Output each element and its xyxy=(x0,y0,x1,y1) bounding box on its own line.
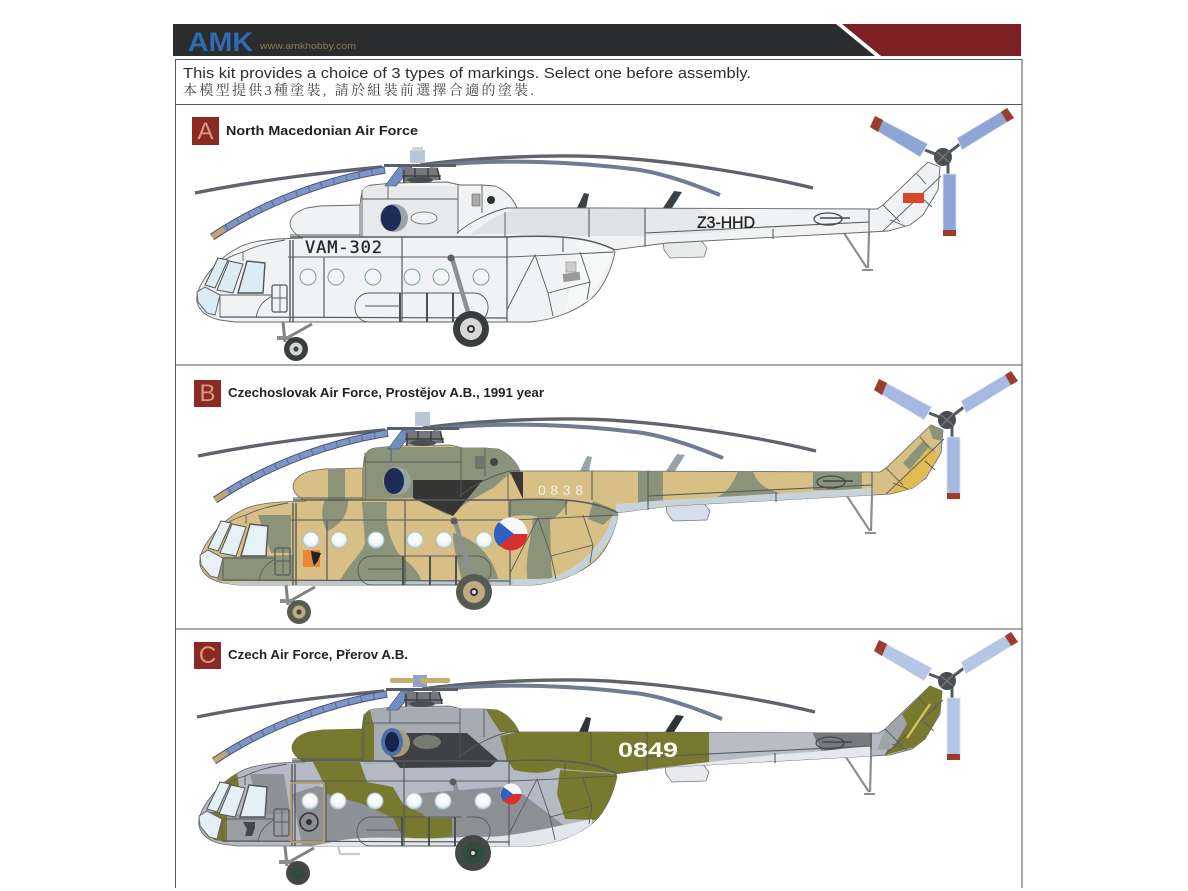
tail rotor A xyxy=(870,108,1014,236)
fuselage C xyxy=(199,686,942,846)
panel B heading: Czechoslovak Air Force, Prostějov A.B., 1991 year xyxy=(228,385,544,400)
windows B xyxy=(303,532,492,548)
engine intake B xyxy=(383,467,411,495)
red corner of header xyxy=(842,24,1021,56)
white slash in header xyxy=(836,24,881,56)
frame lines xyxy=(175,59,1022,888)
registration VAM-302: VAM-302 xyxy=(305,238,382,258)
camouflage B xyxy=(203,425,945,587)
roundel B xyxy=(494,518,528,550)
shading A xyxy=(362,186,730,312)
crest B xyxy=(303,550,321,567)
fuselage B xyxy=(200,425,943,585)
main rotor A xyxy=(195,147,813,237)
windows C xyxy=(302,793,491,809)
helicopter A: North Macedonian Air Force xyxy=(195,108,1014,361)
panel C heading: Czech Air Force, Přerov A.B. xyxy=(228,647,408,662)
helicopter C: Czech Air Force xyxy=(197,632,1018,885)
lion emblem C xyxy=(243,822,255,836)
fin lettering C xyxy=(907,704,930,738)
panel A heading: North Macedonian Air Force xyxy=(226,123,418,138)
insignia C xyxy=(300,813,318,831)
helicopter B: Czechoslovak Air Force xyxy=(198,371,1018,624)
panel B heading badge: B xyxy=(199,380,216,407)
panel B heading badge xyxy=(194,380,221,407)
fin flag xyxy=(903,193,924,203)
main rotor C xyxy=(197,675,815,761)
serial 0849: 0849 xyxy=(618,739,678,762)
panel C heading badge xyxy=(194,642,221,669)
fuselage A xyxy=(197,162,940,322)
header bar xyxy=(173,24,1021,57)
panel A heading badge: A xyxy=(197,118,214,145)
tail rotor C xyxy=(874,632,1018,760)
website url: www.amkhobby.com xyxy=(259,41,356,52)
intro text chinese: 本模型提供3種塗裝, 請於組裝前選擇合適的塗裝. xyxy=(183,82,534,99)
registration Z3-HHD: Z3-HHD xyxy=(697,213,755,232)
panel C heading badge: C xyxy=(199,642,216,669)
engine intake A xyxy=(380,204,408,232)
main rotor B xyxy=(198,412,816,500)
panel A heading badge xyxy=(192,117,219,145)
intro text: This kit provides a choice of 3 types of markings. Select one before assembly. xyxy=(183,65,751,82)
engine intake C xyxy=(381,728,410,757)
windows A xyxy=(300,269,489,285)
camouflage C xyxy=(208,686,944,848)
intro text xyxy=(183,65,751,99)
serial 0838: 0838 xyxy=(538,482,583,498)
AMK logo: AMK xyxy=(188,27,254,57)
roundel C xyxy=(500,784,522,804)
tail rotor B xyxy=(874,371,1018,499)
door frame C xyxy=(291,783,324,842)
